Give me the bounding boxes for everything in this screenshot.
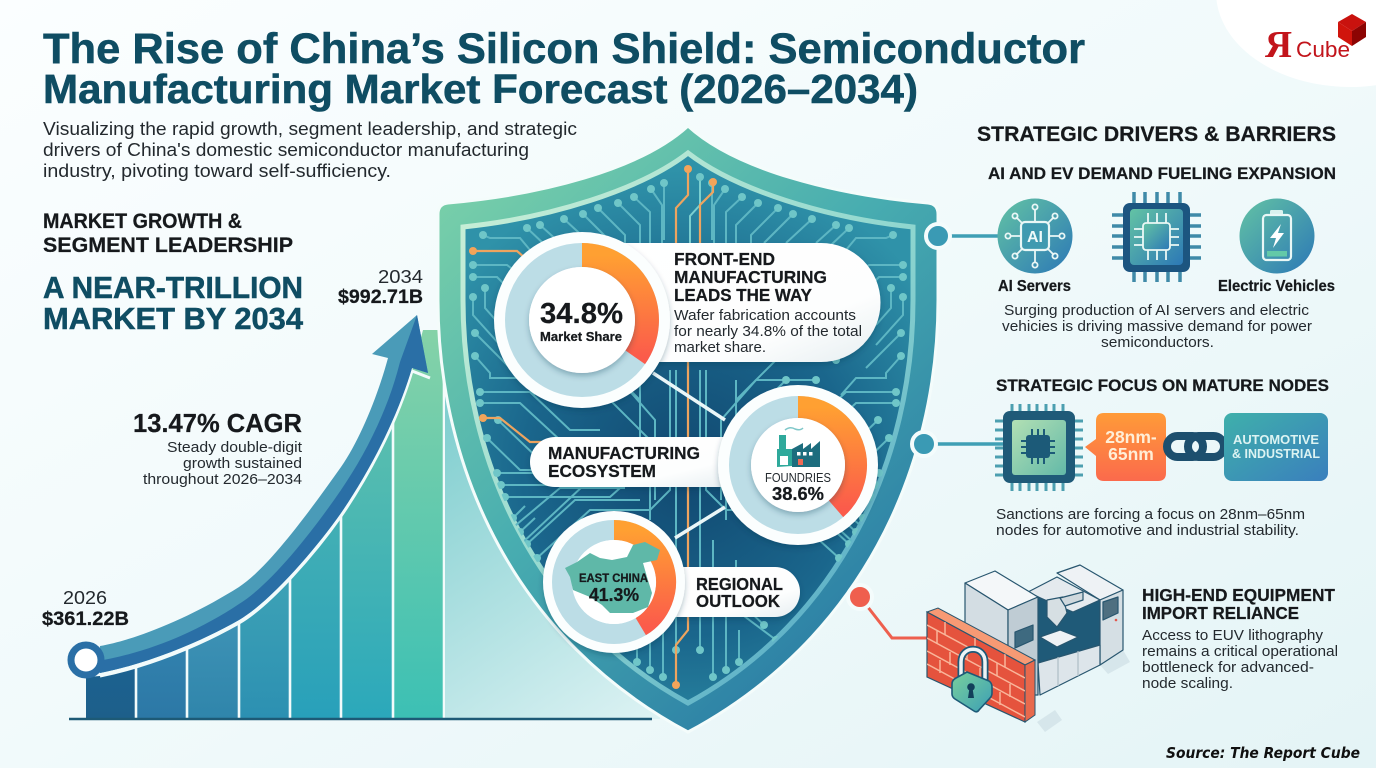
icon: chain link [1167,436,1224,457]
subheading: mature nodes: STRATEGIC FOCUS ON MATURE NODES [996,376,1329,395]
icon: brick wall [927,608,1035,722]
donut: 38.6% [740,407,856,523]
heading and description: market share. [674,339,766,356]
panel: front-end manufacturing [494,232,880,408]
donut label: Market Share [540,329,622,344]
text: high-end equipment: IMPORT RELIANCE [1142,603,1299,623]
subtitle [43,119,577,181]
icon: mature node chip [995,404,1083,491]
text: AI and EV demand [1002,302,1312,351]
text: high-end equipment: remains a critical operational [1142,643,1338,660]
logo: RCube: Я [1265,24,1292,66]
donut label [540,298,623,344]
text: mature nodes [996,506,1305,539]
text: AI and EV demand: vehicies is driving massive demand for power [1002,318,1312,335]
section heading: market growth: MARKET GROWTH & [43,210,242,233]
section heading: market growth: SEGMENT LEADERSHIP [43,234,293,257]
text: AI and EV demand: Surging production of AI servers and electric [1004,302,1310,319]
headline: near-trillion market: MARKET BY 2034 [43,301,304,336]
label: 2026 value: $361.22B [42,609,129,630]
donut label: 41.3% [589,585,639,605]
icon: electric vehicles battery [1240,198,1314,274]
donut label: FOUNDRIES [765,470,831,485]
heading and description: MANUFACTURING [674,267,827,287]
text: high-end equipment: node scaling. [1142,675,1233,692]
subtitle: Visualizing the rapid growth, segment leadership, and strategic [43,119,577,139]
shield [438,126,938,732]
text: mature nodes: nodes for automotive and industrial stability. [996,522,1299,539]
heading: ECOSYSTEM [548,461,656,481]
donut label: EAST CHINA [579,573,648,585]
icon: lithography machine [965,565,1130,732]
text: mature nodes: Sanctions are forcing a focus on 28nm–65nm [996,506,1305,523]
connector: equipment barrier [848,585,930,638]
title [43,25,1085,112]
donut label [579,573,648,605]
label: 2026 value: 2026 [63,588,107,608]
heading: OUTLOOK [696,591,780,611]
panel: regional outlook [543,511,800,653]
callout: CAGR: 13.47% CAGR [133,408,302,438]
callout: CAGR: growth sustained [183,455,302,472]
heading and description: LEADS THE WAY [674,285,812,305]
label: 2034 value: 2034 [378,267,423,287]
logo: RCube [1265,14,1366,66]
logo: RCube: Cube [1296,37,1350,62]
icon: AI servers: AI [1027,229,1043,246]
heading [548,443,700,481]
text: high-end equipment [1142,585,1338,692]
badge: automotive and industrial: & INDUSTRIAL [1232,446,1320,461]
donut: 41.3% [562,530,666,634]
label: AI servers: AI Servers [998,278,1071,295]
badge: 28nm-65nm [1085,413,1166,481]
label: 2034 value [338,267,423,308]
badge: automotive and industrial: AUTOMOTIVE [1233,432,1319,447]
badge: automotive and industrial [1224,413,1328,481]
headline: near-trillion market: A NEAR-TRILLION [43,270,303,305]
arrow: growth curve [71,315,428,675]
callout: CAGR: Steady double-digit [167,439,303,456]
circuit traces [473,169,903,685]
icon: AI servers [998,198,1072,274]
title: The Rise of China’s Silicon Shield: Semiconductor [43,25,1085,73]
donut label [765,470,831,504]
heading: REGIONAL [696,574,783,594]
headline: near-trillion market [43,270,304,336]
icon: factory [777,428,820,467]
callout: CAGR [133,408,303,488]
heading and description [674,249,862,356]
subtitle: industry, pivoting toward self-sufficiency. [43,161,391,181]
logo corner badge [1216,0,1376,87]
label: 2034 value: $992.71B [338,287,423,308]
section heading: market growth [43,210,293,257]
subtitle: drivers of China's domestic semiconductor manufacturing [43,140,529,160]
text: high-end equipment: bottleneck for advanced- [1142,659,1314,676]
source note: Source: The Report Cube [1166,744,1360,762]
subheading: AI and EV: AI AND EV DEMAND FUELING EXPANSION [988,164,1336,183]
label: electric vehicles: Electric Vehicles [1218,278,1335,295]
heading and description: FRONT-END [674,249,775,269]
map: China [565,542,660,613]
heading and description: Wafer fabrication accounts [674,307,856,324]
connector lines between circles [653,373,725,538]
heading [696,574,783,611]
text: high-end equipment: Access to EUV lithography [1142,627,1323,644]
callout: CAGR: throughout 2026–2034 [143,471,302,488]
text: AI and EV demand: semiconductors. [1101,334,1214,351]
text: high-end equipment: HIGH-END EQUIPMENT [1142,585,1335,605]
heading and description: for nearly 34.8% of the total [674,323,862,340]
connector: mature nodes [912,432,1003,456]
donut label: 34.8% [540,298,623,330]
area chart: market growth columns [69,300,660,719]
connector: AI demand [926,224,1000,248]
panel: manufacturing ecosystem [530,385,878,545]
label: 2026 value [42,588,129,630]
badge: 28nm-65nm: 65nm [1108,444,1154,464]
title: Manufacturing Market Forecast (2026–2034) [43,66,918,112]
heading: MANUFACTURING [548,443,700,463]
icon: central chip [1112,192,1201,282]
donut: 34.8% [517,255,647,385]
badge: 28nm-65nm: 28nm- [1105,427,1157,447]
icon: padlock [952,649,992,712]
donut label: 38.6% [772,483,824,504]
heading: strategic drivers: STRATEGIC DRIVERS & BARRIERS [977,123,1336,146]
